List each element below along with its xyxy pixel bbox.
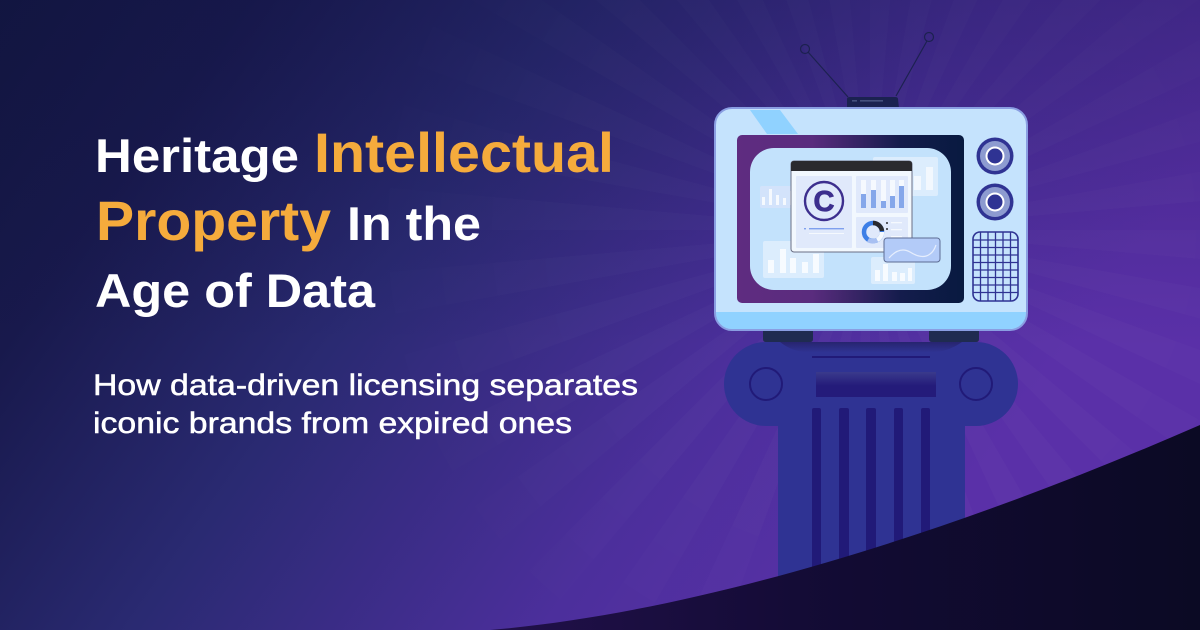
tv feet: [763, 328, 979, 342]
antennas: [800, 32, 934, 97]
screen frame: [737, 135, 964, 303]
line chart card: [884, 238, 940, 262]
title: Age of Data: [95, 264, 376, 317]
volute ring left: [750, 368, 782, 400]
bar chart panel: [856, 176, 908, 213]
antenna base: [847, 97, 899, 108]
volute ring right: [960, 368, 992, 400]
speaker grille: [973, 232, 1018, 301]
title: Property: [96, 189, 331, 252]
knob top: [976, 138, 1014, 174]
capital shaded top: [780, 342, 962, 352]
tv body: [715, 108, 1027, 330]
subtitle: [93, 369, 638, 440]
title: [95, 121, 614, 317]
column pedestal: [724, 342, 1018, 590]
dashboard window: [791, 161, 912, 252]
column shaft: [778, 420, 965, 590]
dark curved hill: [490, 425, 1200, 630]
title: In the: [347, 197, 481, 250]
title: Intellectual: [314, 121, 614, 184]
television: [715, 32, 1027, 342]
faded chart top right: [873, 157, 938, 196]
subtitle: iconic brands from expired ones: [93, 407, 572, 440]
capital recess: [816, 372, 936, 397]
donut panel: [856, 217, 908, 248]
capital line: [812, 356, 930, 358]
faded chart bottom left: [763, 241, 824, 278]
copyright panel: C: [814, 186, 835, 218]
faded chart bottom right: [871, 257, 915, 284]
screen: [750, 148, 951, 290]
column flutes: [812, 408, 930, 578]
title: Heritage: [95, 129, 299, 182]
knob bottom: [976, 184, 1014, 220]
column capital: [724, 342, 1018, 426]
subtitle: How data-driven licensing separates: [93, 369, 638, 402]
faded chart left: [760, 186, 798, 208]
